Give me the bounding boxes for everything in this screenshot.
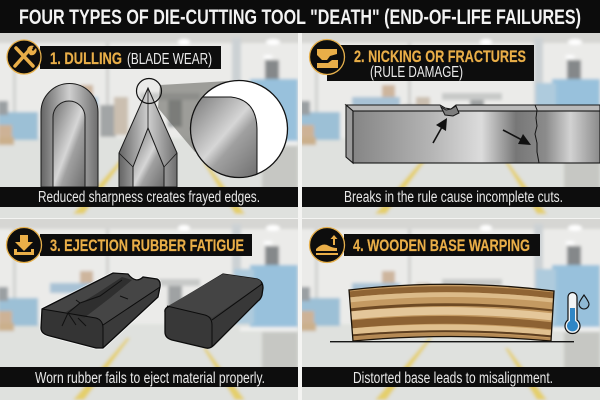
caption: ejection <box>0 367 298 387</box>
heading label: dulling: 1. DULLING <box>50 49 122 68</box>
heading label: ejection rubber fatigue: 3. EJECTION RUBBER FATIGUE <box>50 236 244 255</box>
heading label: dulling: (BLADE WEAR) <box>127 51 212 68</box>
diagram: rounded blade cross-section <box>41 84 98 187</box>
arrow to nick <box>433 118 447 143</box>
diagram: warped wooden base <box>330 284 574 342</box>
diagram: steel rule with nick and crack <box>346 105 600 163</box>
caption: dulling <box>0 187 298 207</box>
arrow to crack <box>503 130 531 145</box>
heading label: nicking or fractures: (RULE DAMAGE) <box>370 64 463 81</box>
icon: warping board with arrow <box>310 228 344 262</box>
heading label: dulling <box>40 46 221 69</box>
callout: magnified blade tip <box>136 78 288 180</box>
caption: ejection: Worn rubber fails to eject material properly. <box>35 370 265 387</box>
caption: dulling: Reduced sharpness creates frayed edges. <box>38 189 260 206</box>
icon: water drop <box>579 295 589 309</box>
diagram: worn rubber block <box>41 273 160 348</box>
panel: 3. ejection rubber fatigue <box>0 214 305 400</box>
title <box>0 0 600 33</box>
diagram: sharp blade cross-section <box>119 88 177 187</box>
icon: thermometer <box>565 292 580 334</box>
heading label: nicking or fractures <box>327 45 534 81</box>
heading label: wooden base warping: 4. WOODEN BASE WARPING <box>353 236 530 255</box>
icon: wrench and screwdriver <box>7 40 41 74</box>
crack in the rule <box>535 105 539 163</box>
icon: fractured rule <box>310 40 344 74</box>
icon: ejection arrow <box>6 228 42 262</box>
nick in the rule edge <box>441 106 459 116</box>
panel: 4. wooden base warping <box>297 214 600 400</box>
diagram: new rubber block <box>165 274 263 348</box>
heading label: wooden base warping <box>344 234 540 256</box>
heading label: nicking or fractures: 2. NICKING OR FRACTURES <box>354 47 526 66</box>
panel: 2. nicking or fractures <box>297 28 600 228</box>
heading label: ejection rubber fatigue <box>40 234 252 256</box>
panel: 1. dulling <box>0 28 305 228</box>
